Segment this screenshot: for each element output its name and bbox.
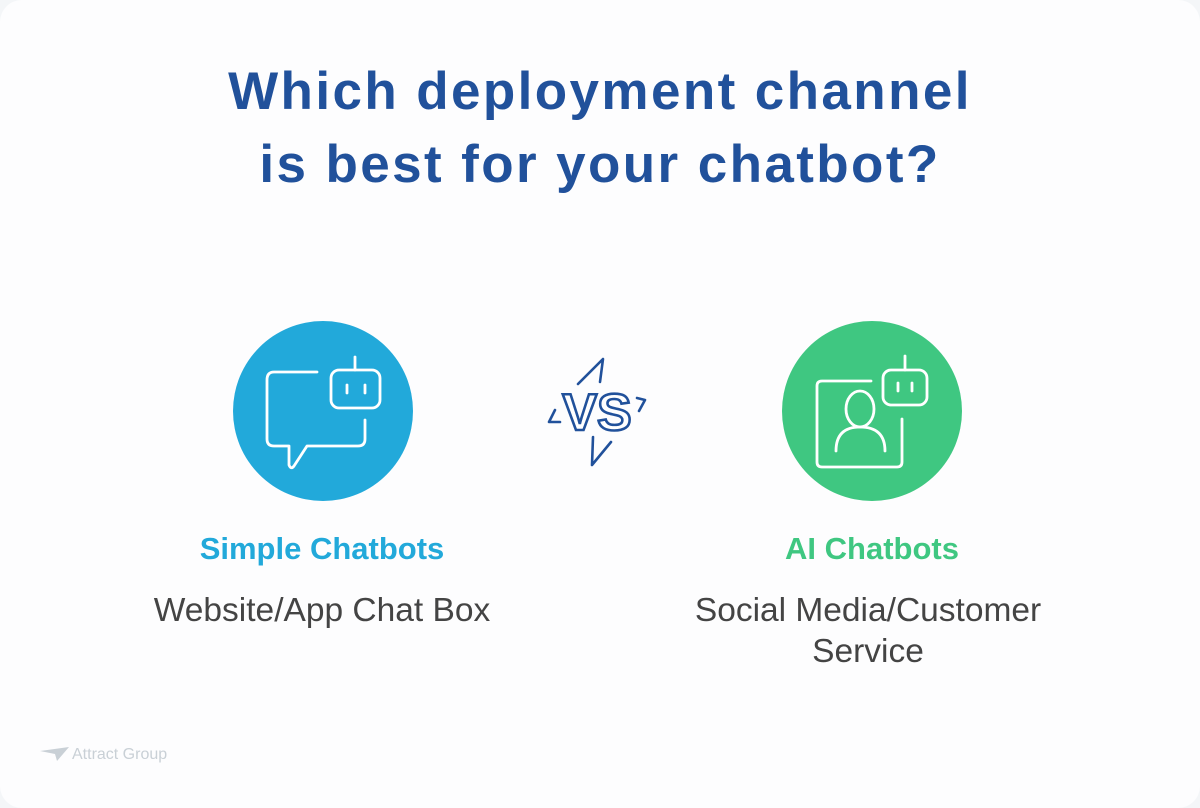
icon: blue chat bot circle bbox=[233, 321, 413, 501]
heading: simple chatbots: Simple Chatbots bbox=[200, 531, 444, 566]
text: simple chatbots channel: Website/App Chat Box bbox=[154, 592, 490, 629]
title: is best for your chatbot? bbox=[259, 135, 941, 194]
text: AI chatbots channel: Social Media/Customer bbox=[695, 592, 1041, 629]
title bbox=[228, 62, 972, 194]
text: AI chatbots channel bbox=[695, 592, 1041, 670]
title: Which deployment channel bbox=[228, 62, 972, 121]
icon: vs lightning bbox=[548, 358, 646, 466]
text: AI chatbots channel: Service bbox=[812, 633, 924, 670]
heading: AI chatbots: AI Chatbots bbox=[785, 531, 959, 566]
icon: green profile bot circle bbox=[782, 321, 962, 501]
logo: attract group: Attract Group bbox=[72, 746, 167, 763]
icon: vs lightning: VS bbox=[562, 384, 632, 442]
